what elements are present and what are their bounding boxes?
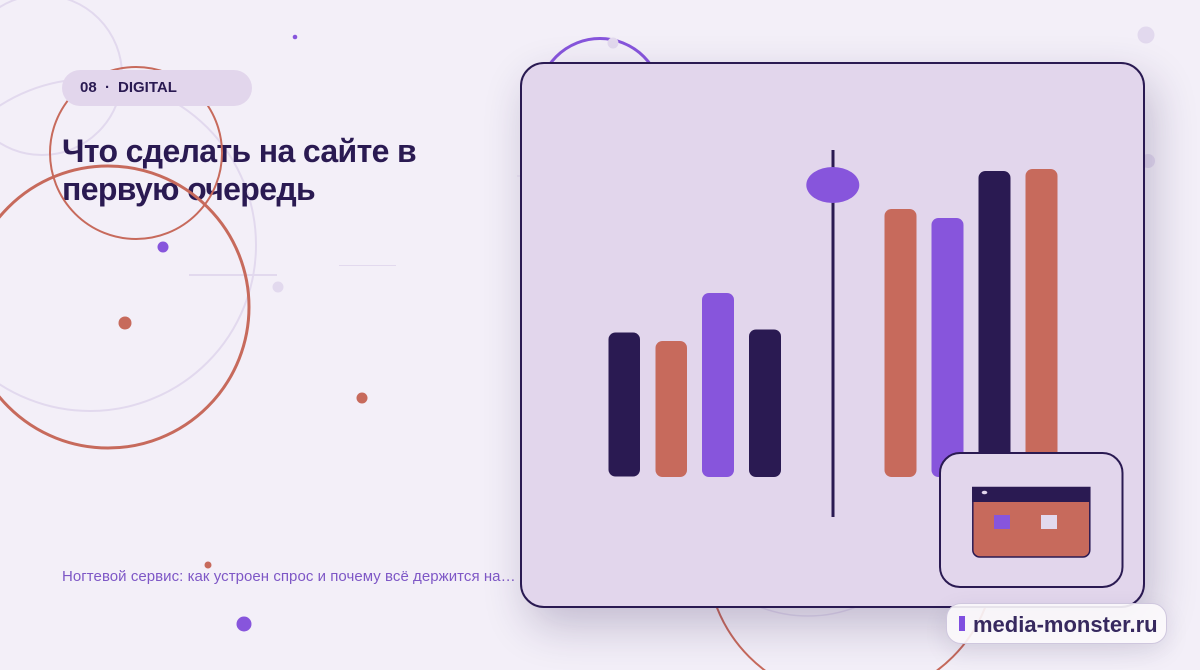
bar group: right bbox=[884, 169, 1058, 477]
title: Что сделать на сайте в bbox=[62, 133, 416, 169]
category badge: 08 bbox=[80, 79, 97, 96]
inset panel: browser window bbox=[940, 453, 1122, 587]
category badge: DIGITAL bbox=[118, 79, 177, 96]
panel: illustration card bbox=[520, 62, 1145, 608]
subtitle: Ногтевой сервис: как устроен спрос и почему всё держится на… bbox=[62, 568, 516, 585]
category badge bbox=[62, 70, 252, 106]
title: первую очередь bbox=[62, 171, 315, 207]
brand label bbox=[946, 603, 1167, 644]
brand label: media-monster.ru bbox=[973, 612, 1158, 637]
title bbox=[62, 133, 416, 207]
divider with oval marker bbox=[806, 150, 859, 517]
bar group: left bbox=[608, 293, 781, 477]
category badge: · bbox=[105, 79, 110, 96]
